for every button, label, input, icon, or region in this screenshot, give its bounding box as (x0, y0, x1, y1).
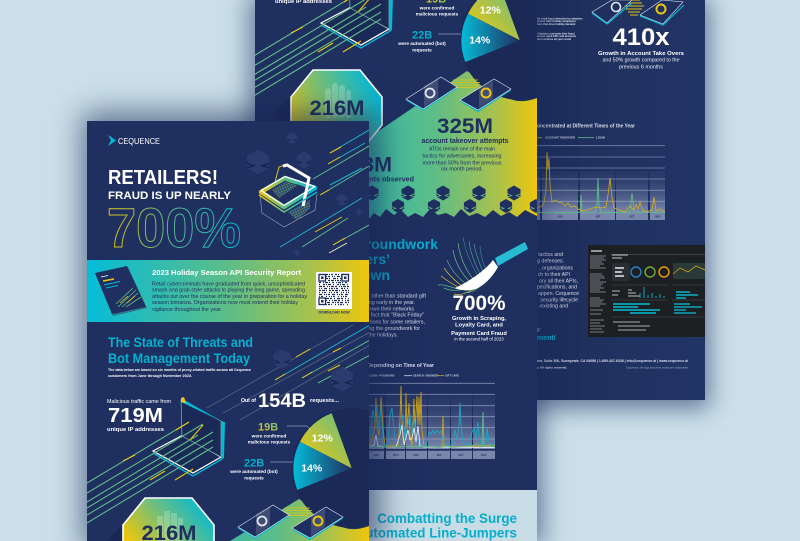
text block: solution paragraph fragment: -existing and (539, 304, 568, 310)
text block: small notes at top: Attackers automate their fraud (537, 32, 575, 36)
text block: groundwork paragraph (368, 294, 427, 339)
stat: 700% growth in scraping (451, 291, 507, 342)
heading: state of threats: Bot Management Today (108, 351, 250, 366)
stat: 325M account takeover attempts: six month period. (441, 167, 483, 173)
stat: 154B requests: 154B (258, 390, 306, 412)
laptop and data streams (252, 0, 393, 97)
footer: contact details (537, 359, 689, 370)
text block: report summary: season bonanza. Organizations now must extend their holiday (152, 300, 298, 306)
line chart: traffic by month: OCT (629, 216, 635, 218)
text block: groundwork paragraph: own their networks (370, 307, 414, 313)
stat: partly hidden incidents observed (362, 153, 414, 184)
text block: data description (108, 368, 251, 378)
gradient band behind phones (268, 71, 537, 222)
text block: data description: customers from June through November 2023. (108, 374, 192, 378)
decorative diagonal streaks (280, 130, 369, 253)
text block: small notes at top: and continue all year round (537, 37, 571, 41)
chart legend: SEARCH / BROWSE (413, 374, 438, 378)
text block: small notes at top: across retail APIs and accounts (537, 34, 577, 38)
dark pie backdrop (460, 0, 580, 100)
dark pie backdrop (292, 408, 412, 528)
text block: report summary: vigilance throughout the year. (152, 307, 222, 313)
chart legend (520, 136, 605, 140)
text block: solution paragraph fragment: appen. Cequence (538, 291, 579, 297)
icon: report book cover (95, 266, 147, 316)
text block: small notes at top: across their holiday campaigns (537, 19, 576, 23)
line chart: traffic by month (520, 146, 665, 220)
callout: 19B malicious requests (416, 0, 479, 17)
text block: groundwork paragraph: ing early in the year. (368, 300, 415, 306)
text block: report summary: smash and grab-style attacks to playing the long game, spreading (152, 288, 305, 294)
chart legend: ACCOUNT TAKEOVER (545, 136, 575, 140)
icon: laptop with data streams (87, 397, 225, 523)
line chart: attack traffic by month: JULY (393, 454, 399, 457)
callout: 19B malicious requests: were confirmed (251, 433, 286, 438)
heading: laying the groundwork: own (362, 267, 390, 283)
text block: solution paragraph fragment: ory all their APIs, (539, 278, 578, 284)
stat: 700% growth in scraping: in the second half of 2023 (454, 337, 504, 342)
callout: 22B bot requests: were automated (bot) (397, 41, 446, 46)
chart legend: LOGIN (596, 136, 605, 140)
link text: ment/ (537, 335, 556, 342)
continued threat section, shifted copy from page one (252, 0, 580, 224)
line chart: attack traffic by month: OCT (458, 454, 464, 457)
chart legend: GIFT CARD (445, 374, 459, 378)
stat: 700% growth in scraping: Payment Card Fraud (451, 331, 507, 337)
text block: solution paragraph fragment: g defenses. (537, 259, 564, 265)
footer: contact details: Cequence, the logo and other marks are trademarks (626, 366, 689, 370)
text block: groundwork paragraph: the holidays. (368, 333, 398, 339)
stat: 410x account take overs (598, 24, 684, 70)
pie chart with 12 and 14 percent (461, 0, 520, 62)
stat: partly hidden incidents observed: ents observed (365, 175, 414, 184)
stat: 719M unique IP addresses (107, 399, 172, 433)
line chart: traffic by month: SEP (596, 216, 601, 218)
stat: 154B requests (241, 390, 340, 412)
icon: two phones with coins (238, 505, 343, 540)
title: Retailers fraud is up nearly 700%: FRAUD IS UP NEARLY (108, 190, 232, 202)
title: Retailers fraud is up nearly 700%: RETAILERS! (108, 166, 218, 189)
text block: small notes at top: bots that drive holiday demand (537, 22, 576, 26)
product dashboard screenshot (588, 245, 705, 337)
heading: combatting the surge of automated line-jumpers: Automated Line-Jumpers (356, 526, 517, 540)
stat: 700% growth in scraping: Growth in Scraping, (452, 316, 506, 322)
chart legend: LOGIN / PASSWORD (369, 374, 395, 378)
stat: 719M unique IP addresses: 719M (108, 405, 163, 427)
callout: 22B bot requests: requests (412, 48, 432, 52)
stat: 719M unique IP addresses: Malicious traffic came from (107, 399, 172, 405)
heading: chart depending on time of year: Depending on Time of Year (367, 363, 434, 369)
text block: groundwork paragraph: tions for some retailers, (370, 319, 425, 325)
heading: combatting the surge of automated line-jumpers: Combatting the Surge (377, 511, 517, 526)
text block: small notes at top (537, 16, 583, 41)
line chart: attack traffic by month: JUN (374, 454, 379, 457)
pie chart with 12 and 14 percent (293, 413, 352, 490)
stat: partly hidden incidents observed: 3M (362, 153, 392, 177)
banner: report download (87, 260, 369, 322)
stat: 216M stop sign: 216M (310, 96, 364, 120)
callout: 19B malicious requests: malicious requests (416, 12, 459, 17)
icon: floating hexagons (247, 132, 362, 256)
heading: laying the groundwork (355, 236, 438, 283)
title: Retailers fraud is up nearly 700%: 700% (107, 196, 241, 259)
heading: laying the groundwork: Groundwork (355, 236, 438, 252)
stat: 216M stop sign (275, 70, 382, 152)
heading: combatting the surge of automated line-jumpers (356, 511, 517, 540)
line chart: attack traffic by month: SEP (437, 454, 442, 457)
text block: solution paragraph fragment: pecifications, and (537, 284, 577, 290)
callout: 22B bot requests: requests (244, 476, 264, 480)
callout: 22B bot requests: 22B (244, 458, 264, 470)
callout: 22B bot requests: 22B (412, 30, 432, 42)
heading: report title: 2023 Holiday Season API Security Report (152, 268, 301, 277)
callout: 19B malicious requests (248, 422, 311, 445)
stat: 410x account take overs: 410x (612, 24, 670, 51)
callout: 19B malicious requests: were confirmed (419, 5, 454, 10)
text block: report summary: Retail cybercriminals have graduated from quick, unsophisticated (152, 282, 305, 288)
stat: 700% growth in scraping: 700% (452, 291, 506, 315)
text block: small notes at top: for retail fraud detection by attackers (537, 16, 583, 20)
callout: 19B malicious requests: malicious requests (248, 440, 291, 445)
link text: y: (537, 327, 541, 333)
icon: two phones with coins (406, 77, 511, 112)
stat: 325M account takeover attempts: ATOs remain one of the main (429, 147, 495, 153)
heading: chart concentrated at different times of the year: oncentrated at Different Times of the Year (537, 124, 635, 130)
line chart: attack traffic by month (360, 383, 495, 459)
stat: 325M account takeover attempts: tactics for adversaries, increasing (422, 154, 502, 160)
stat: 325M account takeover attempts: more than 50% from the previous (422, 160, 502, 166)
footer: contact details: y. All rights reserved. (537, 366, 567, 370)
stat: 325M account takeover attempts (422, 114, 508, 173)
stat: 410x account take overs: previous 6 months (619, 64, 663, 70)
text block: solution paragraph fragment: security lifecycle (540, 298, 578, 304)
stat: 719M unique IP addresses: unique IP addresses (107, 427, 164, 433)
heading: laying the groundwork: ers’ (365, 251, 390, 267)
stat: 700% growth in scraping: Loyalty Card, and (455, 323, 503, 329)
line chart: traffic by month: NOV (655, 216, 661, 218)
pie chart with 12 and 14 percent: 12% (480, 5, 501, 17)
stat: 154B requests: Out of (241, 398, 256, 404)
line chart: attack traffic by month: AUG (413, 454, 419, 457)
decorative hexagon rows (365, 186, 542, 224)
heading: state of threats: The State of Threats and (108, 335, 253, 350)
panel: page one of the infographic, front sheet (87, 121, 369, 541)
gradient band behind phones (230, 499, 369, 541)
panel: page three of the infographic, back sheet (520, 0, 705, 400)
text block: report summary (152, 282, 307, 313)
icon: phones with coins (592, 0, 684, 25)
title: Retailers fraud is up nearly 700% (107, 166, 241, 259)
stat: 216M stop sign (107, 498, 214, 541)
logo: Cequence (108, 135, 160, 146)
text block: groundwork paragraph: fact that "Black Friday" (371, 313, 424, 319)
callout: 19B malicious requests: 19B (258, 422, 278, 434)
link text (537, 327, 556, 342)
text block: solution paragraph fragment (537, 252, 579, 310)
text block: data description: The data below are based on six months of proxy-related traffic across all Cequence (108, 368, 251, 372)
text block: solution paragraph fragment: tactics and (538, 252, 563, 258)
icon: broom sweeping (438, 237, 528, 295)
text block: groundwork paragraph: other than standard gift (372, 294, 427, 300)
stat: 410x account take overs: Growth in Account Take Overs (598, 51, 684, 57)
text block: solution paragraph fragment: , organizations (539, 265, 573, 271)
panel: page two of the infographic, middle sheet (255, 0, 537, 541)
pie chart with 12 and 14 percent: 12% (312, 433, 333, 445)
heading: state of threats (108, 335, 253, 366)
footer: contact details: ma, Suite 200, Sunnyvale, CA 94086 | 1-650-437-6338 | info@cequence.ai | www.cequence.ai (537, 359, 688, 363)
text block: report summary: attacks out over the course of the year in preparation for a holiday (152, 294, 307, 300)
stat: 325M account takeover attempts: 325M (437, 114, 493, 138)
text block: solution paragraph fragment: ch to their API (538, 272, 570, 278)
QR code: DOWNLOAD NOW (318, 310, 350, 314)
chart legend (369, 374, 459, 378)
line chart: traffic by month: AUG (557, 216, 563, 218)
icon: shopping basket (259, 165, 317, 227)
pie chart with 12 and 14 percent: 14% (469, 35, 491, 47)
stat: 154B requests: requests... (310, 398, 340, 404)
callout: 22B bot requests (229, 458, 293, 480)
callout: 22B bot requests (397, 30, 461, 52)
callout: 22B bot requests: were automated (bot) (229, 469, 278, 474)
QR code (316, 272, 352, 314)
stat: 410x account take overs: and 50% growth compared to the (602, 58, 680, 64)
line chart: attack traffic by month: NOV (481, 454, 487, 457)
icon: hexagons in threat section (273, 349, 353, 392)
stat: 325M account takeover attempts: account takeover attempts (422, 136, 508, 145)
pie chart with 12 and 14 percent: 14% (301, 463, 323, 475)
logo: Cequence: CEQUENCE (118, 136, 160, 146)
decorative diagonal streaks upper right (207, 325, 370, 420)
text block: groundwork paragraph: ng the groundwork for (368, 326, 420, 332)
